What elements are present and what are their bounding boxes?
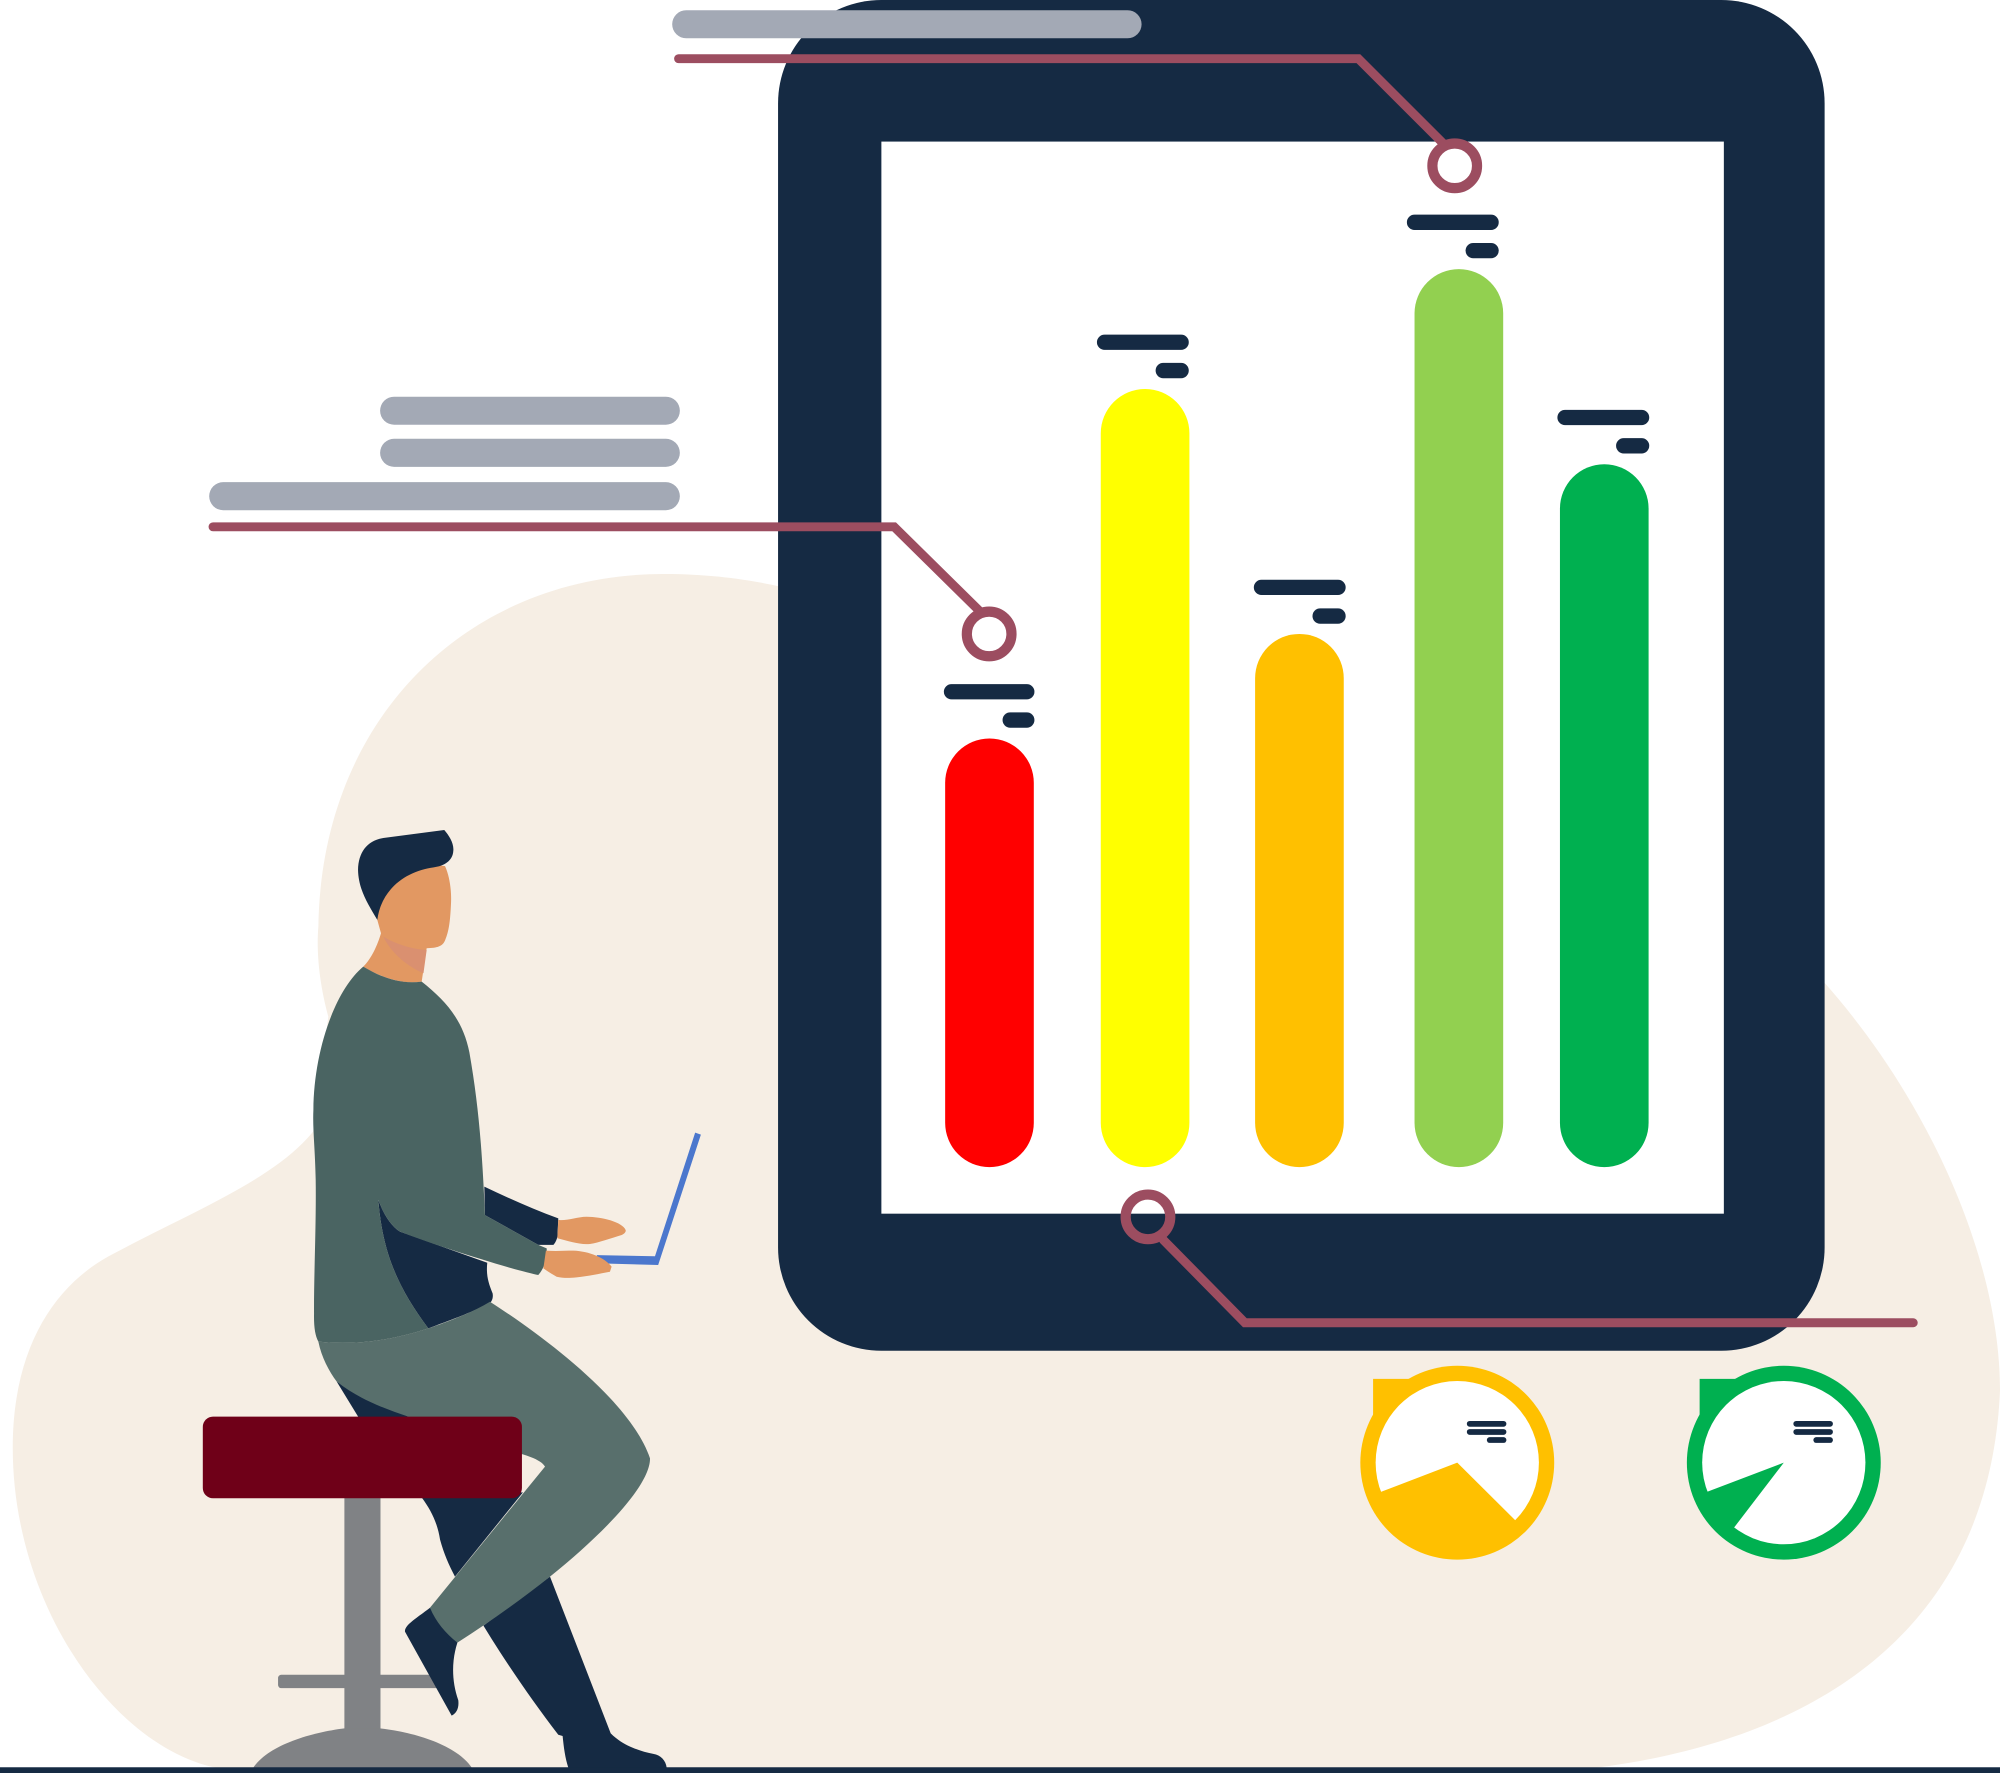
callout: top [672,10,1477,188]
person [313,830,701,1768]
far thigh [337,1382,409,1417]
upper hand [557,1217,626,1244]
near foot [405,1608,458,1716]
placeholder: green bar [1557,410,1649,453]
marker [1126,1195,1170,1239]
bar: red [945,739,1034,1167]
bar: yellow [1101,389,1189,1167]
lower hand [543,1251,612,1278]
laptop [597,1133,701,1265]
neck and face [363,861,451,982]
leader line [1163,1240,1913,1323]
ground line [0,1767,2000,1773]
corner tab [1700,1379,1783,1462]
footrest [278,1675,439,1688]
post [344,1492,380,1735]
placeholder: red bar [944,684,1034,728]
pie wedge [1703,1463,1784,1531]
trousers [318,1302,650,1643]
background blob [13,574,2000,1768]
text placeholder lines [209,397,680,510]
callout: bottom [1126,1195,1913,1323]
leader line [213,527,981,612]
label placeholder [1793,1421,1833,1443]
back arm [484,1187,558,1245]
tablet body [778,0,1825,1351]
leader line [679,59,1446,147]
text placeholder [672,10,1142,38]
bar chart [945,269,1649,1167]
bar value placeholders [944,215,1649,728]
tablet device [778,0,1825,1351]
pie face [1702,1381,1865,1544]
stool lower parts [253,1492,472,1768]
hair [358,830,453,920]
pie face [1376,1381,1539,1544]
torso underside [378,1200,493,1328]
callout: left [209,397,1011,656]
bar: light green [1415,269,1503,1167]
far knee under seat [422,1492,523,1577]
tablet screen [881,142,1724,1214]
bar: amber [1255,634,1344,1167]
pie chart: amber [1360,1366,1554,1560]
pie wedge [1376,1463,1519,1549]
placeholder: yellow bar [1097,335,1189,378]
far lower leg and shoe [483,1577,667,1768]
marker [967,612,1011,656]
ring [1360,1366,1554,1560]
corner tab [1373,1379,1457,1462]
label placeholder [1467,1421,1506,1443]
bar: green [1560,464,1649,1167]
pie chart: green [1687,1366,1881,1560]
stool seat [203,1417,522,1498]
placeholder: light green bar [1407,215,1499,258]
neck shadow [383,937,427,973]
sweater [313,967,547,1343]
marker [1432,143,1477,188]
base [253,1728,472,1768]
ring [1687,1366,1881,1560]
placeholder: amber bar [1254,580,1346,624]
